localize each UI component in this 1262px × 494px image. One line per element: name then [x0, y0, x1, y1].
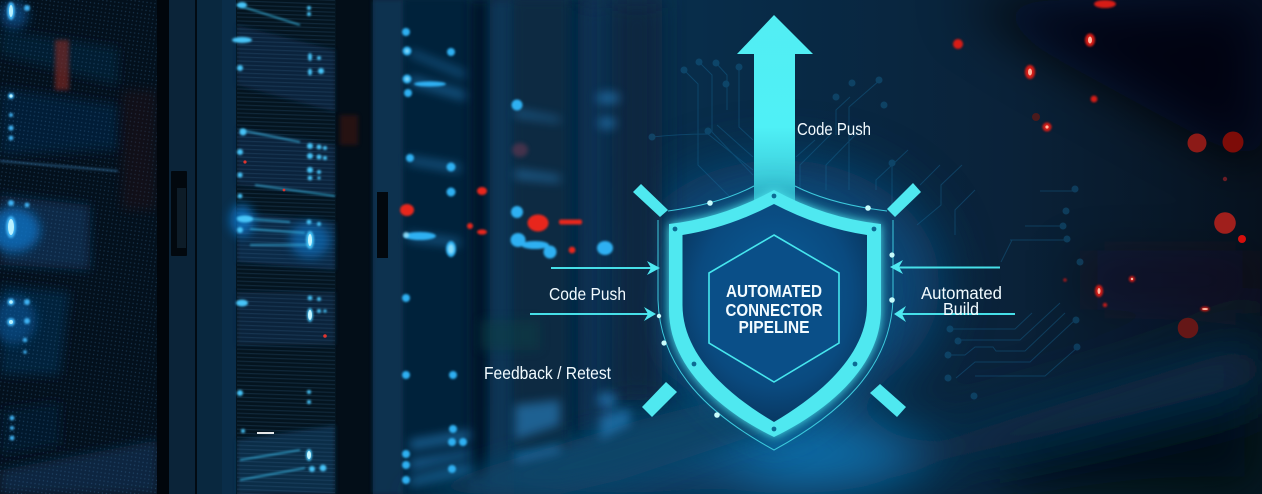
shield body: [669, 190, 881, 437]
red bokeh lights: [953, 0, 1246, 338]
arrow: upward code push: [737, 15, 813, 202]
arrow: left input upper: [551, 261, 660, 275]
outline nodes: [657, 200, 895, 418]
badge title: AUTOMATED: [726, 281, 822, 301]
badge title: CONNECTOR: [726, 300, 823, 320]
hexagon badge: [709, 235, 839, 382]
circuit traces: [648, 58, 1084, 400]
label: code push top: Code Push: [797, 119, 871, 139]
shield inner panel: [682, 204, 867, 422]
outer thin shield outline: [658, 186, 893, 450]
label: automated build: [921, 283, 1002, 319]
badge title: PIPELINE: [738, 317, 810, 337]
label: feedback retest: Feedback / Retest: [484, 363, 611, 383]
rack door frame: [157, 0, 236, 494]
label: code push left: Code Push: [549, 284, 626, 304]
server rack 2: [230, 0, 373, 494]
label: automated build: Automated: [921, 283, 1002, 303]
blurred status lights: [400, 28, 613, 484]
radiating ticks: [633, 183, 921, 417]
server rack 1: [0, 0, 158, 494]
shield rivets: [673, 194, 876, 431]
right side darkness: [470, 0, 1262, 494]
shield halo: [648, 175, 900, 460]
arrow: right input lower: [894, 306, 1015, 322]
shield: [648, 175, 900, 460]
arrow: left input lower: [530, 307, 656, 321]
badge title: [726, 281, 823, 337]
blurred rack columns: [373, 0, 800, 494]
label: automated build: Build: [943, 299, 979, 319]
arrow: right input upper: [890, 260, 1000, 274]
